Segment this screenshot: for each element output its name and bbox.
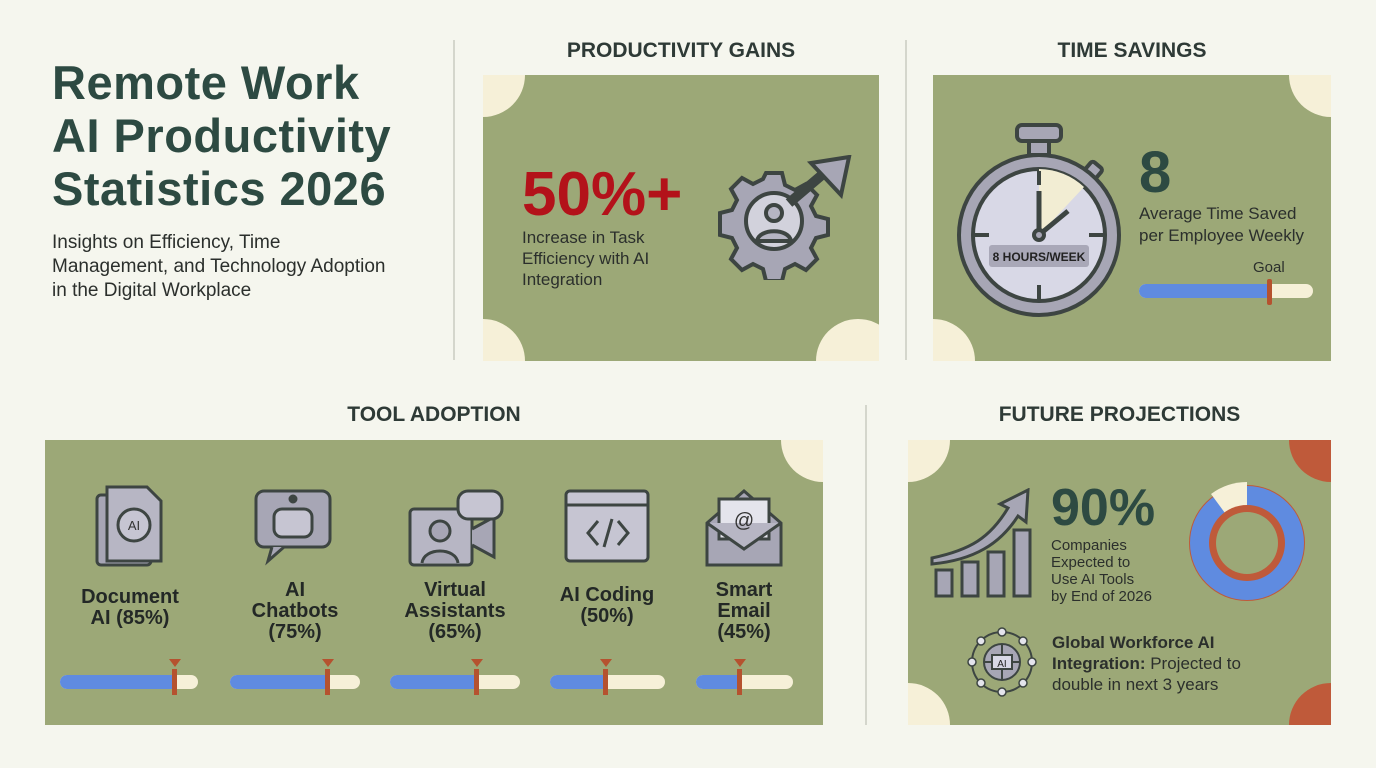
tool: AI chatbots: AI [285, 579, 305, 601]
description: Integration [522, 270, 602, 289]
icon: AI globe network: AI [997, 659, 1007, 670]
icon: stopwatch [957, 123, 1121, 317]
description: per Employee Weekly [1139, 226, 1304, 245]
stat 90%: 90% [1051, 479, 1155, 537]
title: Remote Work [52, 56, 360, 109]
stat 8: 8 [1139, 140, 1171, 205]
description: Average Time Saved [1139, 204, 1296, 223]
text: global workforce: Integration: Projected to [1052, 654, 1241, 673]
icon: AI globe network [967, 627, 1037, 697]
text: global workforce [1052, 633, 1241, 694]
icon: gear with arrow [718, 155, 852, 280]
text: global workforce: double in next 3 years [1052, 675, 1218, 694]
title [52, 56, 391, 215]
stat 50%: 50%+ [522, 160, 682, 229]
tool: AI coding: (50%) [580, 605, 634, 627]
description: Use AI Tools [1051, 571, 1134, 588]
subtitle [52, 232, 385, 301]
description: by End of 2026 [1051, 588, 1152, 605]
title: AI Productivity [52, 109, 391, 162]
tool: virtual assistants: Virtual [424, 579, 486, 601]
icon: growth chart [930, 488, 1032, 598]
text: global workforce: Global Workforce AI [1052, 633, 1214, 652]
donut chart 90% [1189, 482, 1305, 601]
tool: AI chatbots: (75%) [268, 621, 322, 643]
tool: smart email: (45%) [717, 621, 771, 643]
progress bar: goal: Goal [1253, 259, 1285, 276]
tool: document AI [60, 486, 198, 695]
title: Statistics 2026 [52, 162, 386, 215]
description [1139, 204, 1304, 245]
tool: AI coding: AI Coding [560, 584, 654, 606]
description: Increase in Task [522, 228, 645, 247]
tool: smart email: @ [734, 510, 754, 532]
progress bar: goal [1139, 259, 1313, 305]
subtitle: Insights on Efficiency, Time [52, 232, 280, 253]
icon: stopwatch: 8 HOURS/WEEK [993, 250, 1086, 264]
tool: virtual assistants: (65%) [428, 621, 482, 643]
tool: document AI: AI [128, 518, 140, 533]
panel: tool adoption [45, 440, 823, 725]
tool: virtual assistants [390, 490, 520, 695]
tool: smart email [696, 489, 793, 695]
description [522, 228, 649, 289]
tool: AI chatbots: Chatbots [252, 600, 338, 622]
tool: smart email: Smart [716, 579, 772, 601]
heading: time savings: TIME SAVINGS [1058, 39, 1206, 62]
heading: productivity gains: PRODUCTIVITY GAINS [567, 39, 795, 62]
tool: document AI: AI (85%) [91, 607, 169, 629]
description: Efficiency with AI [522, 249, 649, 268]
heading: future projections: FUTURE PROJECTIONS [999, 403, 1240, 426]
description: Expected to [1051, 554, 1130, 571]
tool: AI coding [550, 490, 665, 695]
panel: future projections [908, 440, 1331, 725]
panel: time savings [933, 75, 1331, 361]
description [1051, 537, 1152, 605]
description: Companies [1051, 537, 1127, 554]
subtitle: in the Digital Workplace [52, 280, 251, 301]
subtitle: Management, and Technology Adoption [52, 256, 385, 277]
tool: virtual assistants: Assistants [404, 600, 506, 622]
tool: smart email: Email [717, 600, 771, 622]
tool: document AI: Document [81, 586, 179, 608]
tool: AI chatbots [230, 490, 360, 695]
panel: productivity gains [483, 75, 879, 361]
heading: tool adoption: TOOL ADOPTION [347, 403, 521, 426]
